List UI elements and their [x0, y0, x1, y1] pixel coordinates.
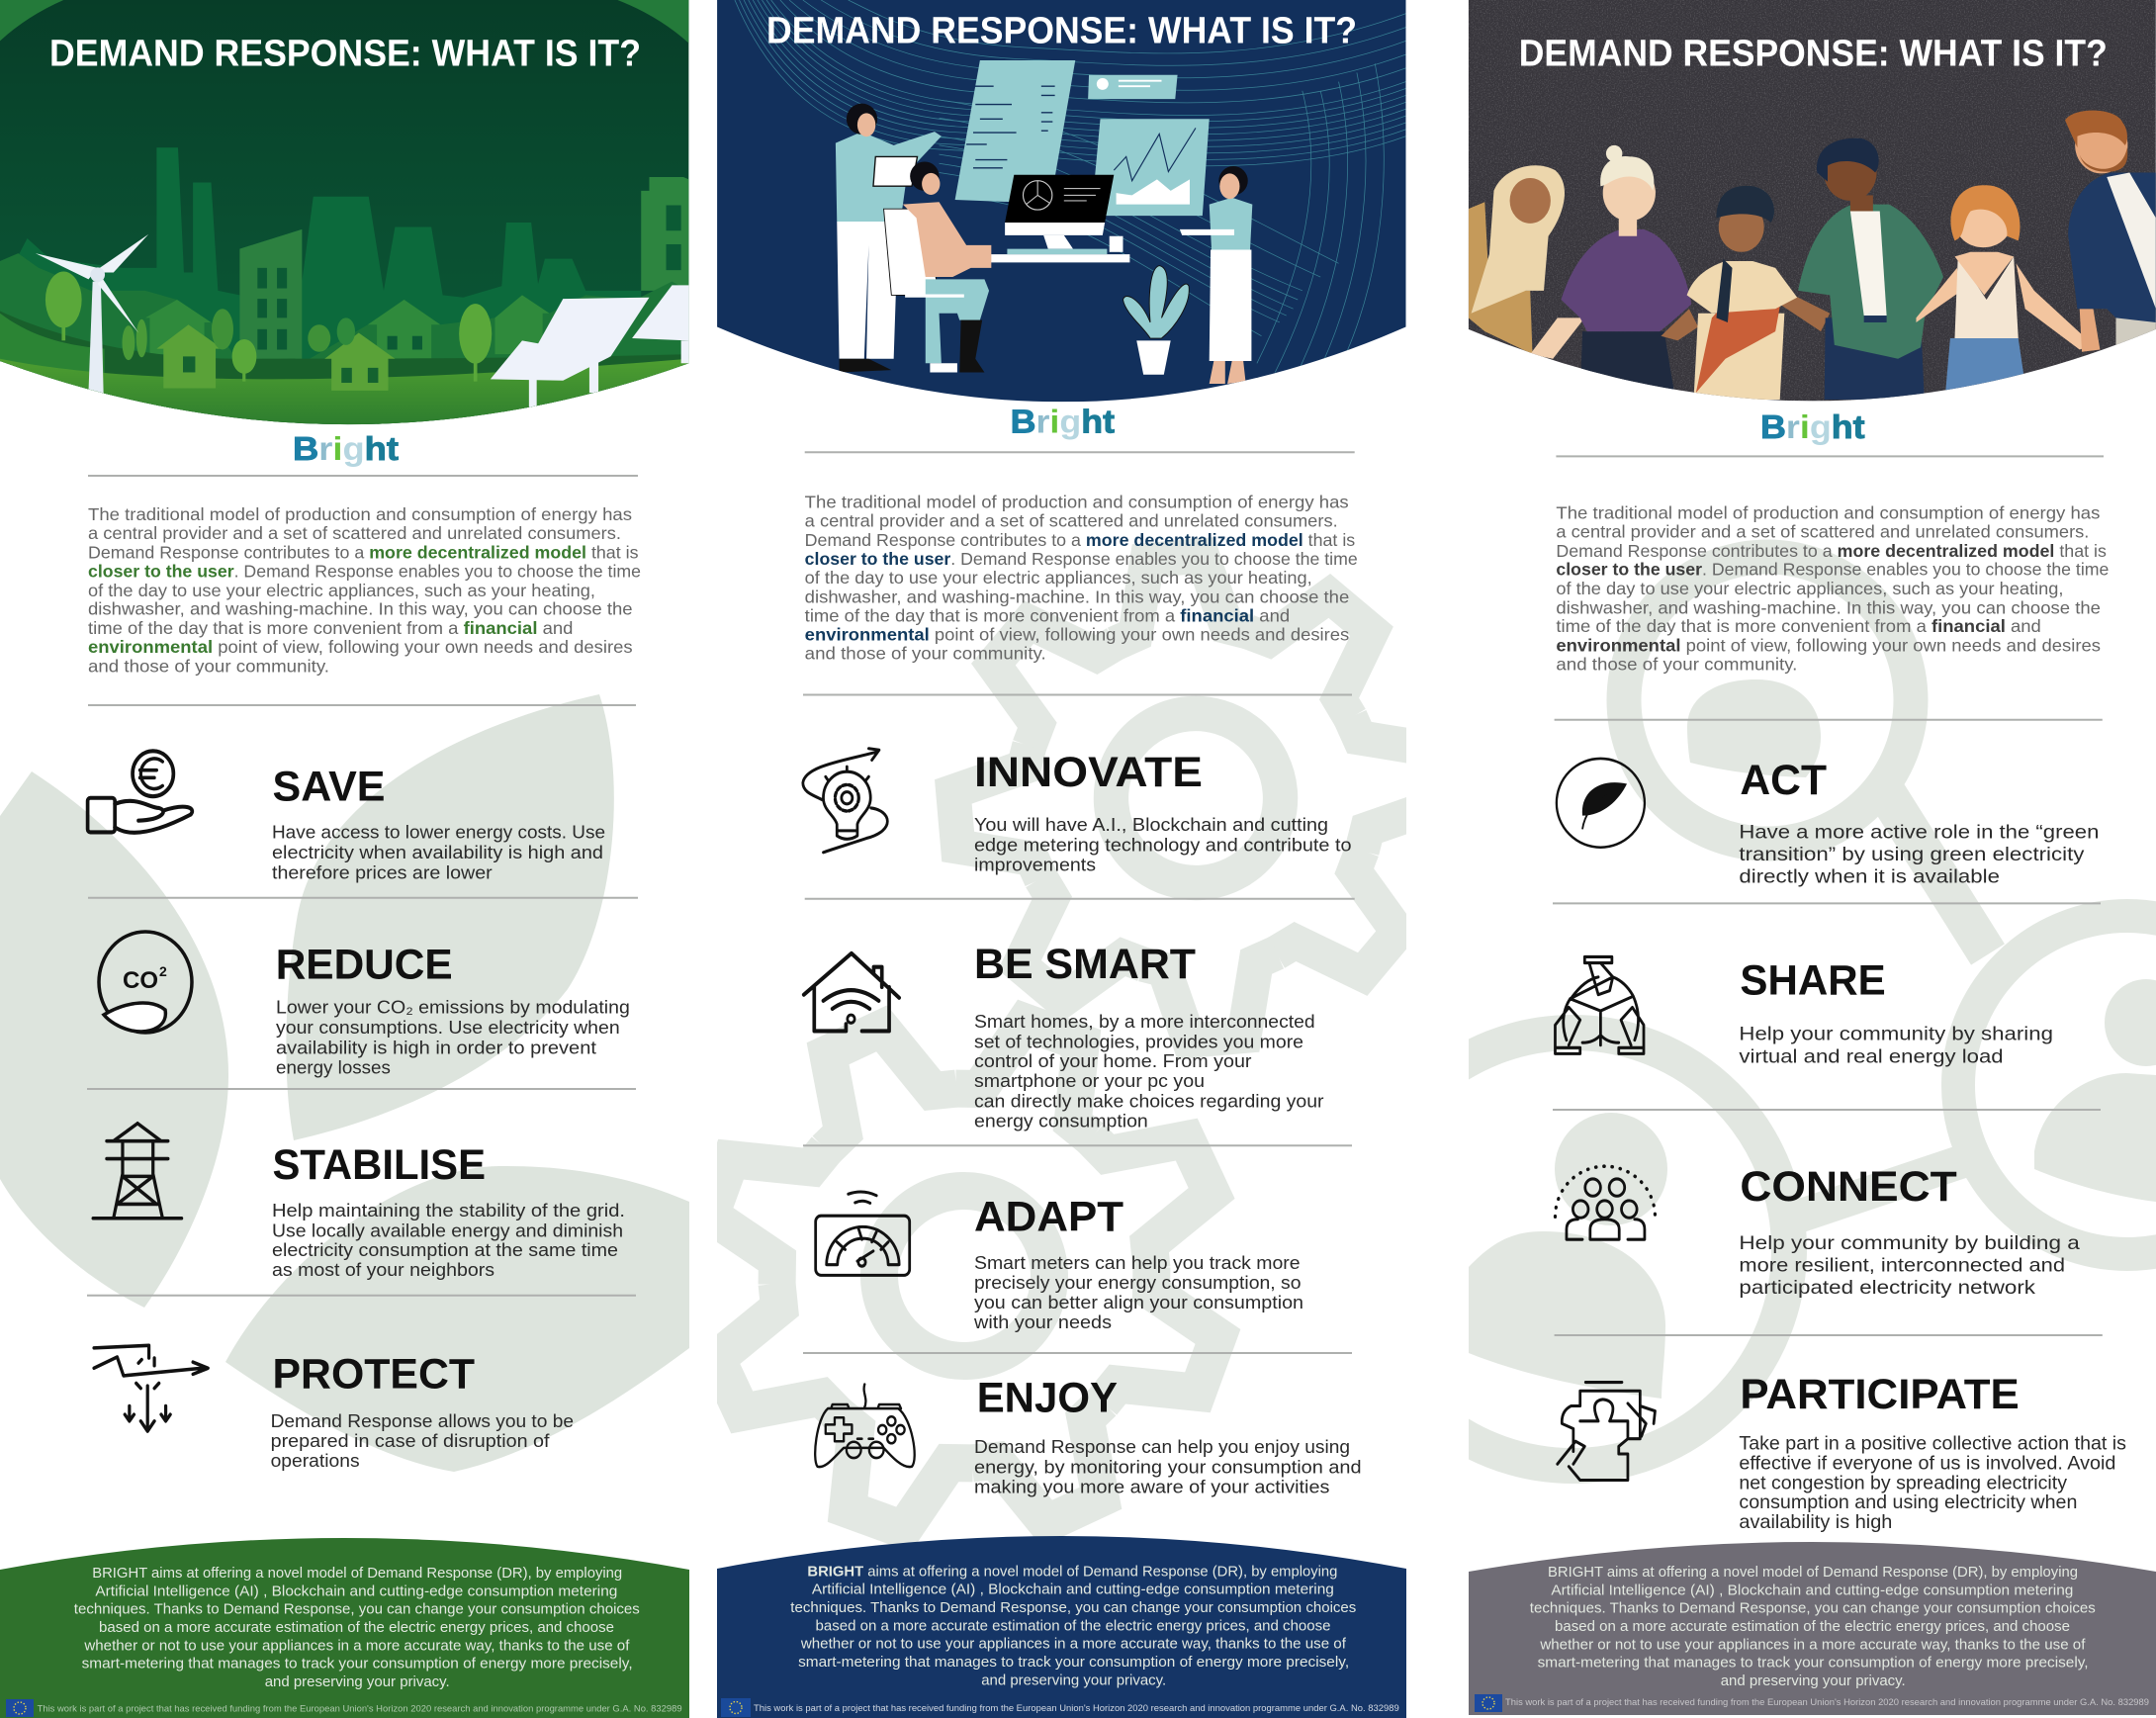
heading: ACT — [1740, 757, 1827, 804]
intro text — [88, 504, 641, 677]
body text — [272, 1200, 625, 1280]
footer text: BRIGHT aims at offering a novel model of Demand Response (DR), by employing — [92, 1565, 622, 1582]
intro text — [1556, 502, 2109, 675]
intro text: dishwasher, and washing-machine. In this way, you can choose the — [88, 599, 633, 619]
footer text: Artificial Intelligence (AI) , Blockchain and cutting-edge consumption metering — [812, 1582, 1334, 1598]
intro text: environmental point of view, following your own needs and desires — [1556, 635, 2101, 655]
heading: STABILISE — [273, 1141, 486, 1189]
body text: prepared in case of disruption of — [271, 1430, 550, 1451]
Bright logo: Bright — [1011, 404, 1115, 440]
body text: making you more aware of your activities — [974, 1476, 1329, 1496]
icon: CO2 bubble with leaf: 2 — [159, 963, 167, 979]
footer band — [717, 1536, 1406, 1718]
body text: smartphone or your pc you — [974, 1070, 1205, 1091]
footer text: and preserving your privacy. — [981, 1672, 1166, 1688]
intro text: and those of your community. — [1556, 655, 1797, 675]
item: Innovate — [803, 749, 1351, 875]
intro text: dishwasher, and washing-machine. In this way, you can choose the — [805, 587, 1349, 606]
heading: SHARE — [1740, 957, 1886, 1005]
intro text: environmental point of view, following your own needs and desires — [805, 624, 1350, 644]
divider — [88, 704, 636, 706]
panel: blue (Innovate, Be Smart, Adapt, Enjoy) — [717, 0, 1406, 1718]
Bright logo: Bright — [1760, 408, 1865, 445]
body text: Have a more active role in the “green — [1739, 822, 2099, 844]
intro text: time of the day that is more convenient from a financial and — [88, 618, 573, 638]
item: Adapt — [816, 1192, 1303, 1332]
heading: REDUCE — [276, 941, 453, 988]
intro text: a central provider and a set of scattered and unrelated consumers. — [88, 523, 621, 543]
icon: disruption arrows — [94, 1345, 208, 1431]
intro text: Demand Response contributes to a more decentralized model that is — [805, 530, 1355, 550]
funding statement: This work is part of a project that has received funding from the European Union's Horizon 2020 research and innovation programme under G.A. No. 832989 — [754, 1703, 1399, 1714]
footer text: techniques. Thanks to Demand Response, you can change your consumption choices — [1530, 1600, 2096, 1617]
icon: hand holding euro coin — [88, 751, 192, 833]
body text: with your needs — [973, 1311, 1112, 1332]
EU flag — [1475, 1694, 1502, 1712]
icon: smart home with wifi — [804, 953, 899, 1031]
footer band — [1469, 1542, 2156, 1715]
icon: smart meter gauge — [816, 1192, 910, 1275]
body text: You will have A.I., Blockchain and cutting — [974, 814, 1328, 835]
intro text: closer to the user. Demand Response enables you to choose the time — [1556, 560, 2109, 580]
intro text: time of the day that is more convenient from a financial and — [805, 606, 1290, 626]
footer text: BRIGHT aims at offering a novel model of Demand Response (DR), by employing — [807, 1563, 1337, 1580]
body text: availability is high in order to prevent — [276, 1037, 596, 1057]
body text — [276, 997, 630, 1077]
heading: ENJOY — [977, 1375, 1118, 1422]
body text: Lower your CO₂ emissions by modulating — [276, 997, 630, 1018]
divider — [1556, 455, 2104, 457]
body text: edge metering technology and contribute to — [974, 834, 1351, 855]
body text: availability is high — [1739, 1511, 1892, 1533]
icon: community group in dotted arc — [1555, 1166, 1655, 1239]
icon: hands holding shared pieces — [1555, 956, 1644, 1053]
heading: PARTICIPATE — [1740, 1371, 2020, 1418]
title: DEMAND RESPONSE: WHAT IS IT? — [49, 34, 641, 75]
item: Reduce — [99, 932, 630, 1077]
panel: green (Save, Reduce, Stabilise, Protect) — [0, 0, 689, 1718]
intro text: time of the day that is more convenient from a financial and — [1556, 616, 2041, 636]
item: Stabilise — [93, 1124, 625, 1280]
icon: electricity pylon — [93, 1124, 182, 1219]
intro text — [805, 492, 1358, 664]
body text: you can better align your consumption — [974, 1292, 1303, 1312]
body text — [1739, 822, 2099, 887]
body text: therefore prices are lower — [272, 861, 493, 882]
intro text: closer to the user. Demand Response enables you to choose the time — [805, 549, 1358, 569]
intro text: and those of your community. — [805, 644, 1046, 664]
body text: energy consumption — [974, 1110, 1148, 1130]
footer text: BRIGHT aims at offering a novel model of Demand Response (DR), by employing — [1548, 1564, 2078, 1581]
footer text: based on a more accurate estimation of the electric energy prices, and choose — [815, 1617, 1331, 1634]
footer text: and preserving your privacy. — [265, 1673, 450, 1690]
body text: transition” by using green electricity — [1739, 844, 2085, 865]
footer text: whether or not to use your appliances in a more accurate way, thanks to the use of — [800, 1636, 1347, 1653]
heading: SAVE — [273, 763, 386, 810]
footer text: whether or not to use your appliances in a more accurate way, thanks to the use of — [83, 1637, 630, 1654]
body text: participated electricity network — [1739, 1277, 2035, 1299]
item: Protect — [94, 1345, 574, 1471]
footer text: smart-metering that manages to track your consumption of energy more precisely, — [82, 1656, 633, 1673]
intro text: Demand Response contributes to a more decentralized model that is — [1556, 541, 2107, 561]
header illustration: team with screens and data — [712, 0, 1411, 408]
body text: Help maintaining the stability of the grid. — [272, 1200, 625, 1221]
body text: Have access to lower energy costs. Use — [272, 822, 605, 843]
footer band — [0, 1538, 689, 1718]
item: Participate — [1558, 1371, 2126, 1533]
body text: Help your community by building a — [1739, 1232, 2080, 1254]
footer text: techniques. Thanks to Demand Response, you can change your consumption choices — [74, 1601, 640, 1618]
intro text: The traditional model of production and consumption of energy has — [1556, 502, 2101, 522]
divider — [88, 475, 638, 477]
body text: net congestion by spreading electricity — [1739, 1473, 2067, 1494]
heading: CONNECT — [1740, 1163, 1957, 1211]
body text: virtual and real energy load — [1739, 1046, 2004, 1068]
intro text: environmental point of view, following your own needs and desires — [88, 637, 633, 657]
footer text: Artificial Intelligence (AI) , Blockchain and cutting-edge consumption metering — [1551, 1582, 2073, 1598]
body text: Demand Response allows you to be — [271, 1410, 574, 1431]
body text: more resilient, interconnected and — [1739, 1254, 2065, 1276]
title: DEMAND RESPONSE: WHAT IS IT? — [1519, 34, 2108, 75]
body text: set of technologies, provides you more — [974, 1031, 1303, 1051]
icon: CO2 bubble with leaf: CO — [123, 967, 158, 994]
body text — [974, 1436, 1362, 1496]
panel: grey (Act, Share, Connect, Participate) — [1468, 0, 2156, 1715]
footer text: smart-metering that manages to track your consumption of energy more precisely, — [798, 1654, 1349, 1671]
body text — [271, 1410, 574, 1471]
body text — [1739, 1432, 2126, 1533]
body text — [973, 1252, 1303, 1332]
intro text: The traditional model of production and consumption of energy has — [88, 504, 632, 524]
body text: Use locally available energy and diminish — [272, 1221, 623, 1241]
intro text: The traditional model of production and consumption of energy has — [805, 492, 1349, 511]
funding statement: This work is part of a project that has received funding from the European Union's Horizon 2020 research and innovation programme under G.A. No. 832989 — [1505, 1697, 2149, 1708]
item: Save — [88, 751, 605, 882]
Bright logo: Bright — [293, 430, 399, 467]
intro text: and those of your community. — [88, 657, 329, 677]
item: Enjoy — [815, 1375, 1362, 1496]
background community network — [1469, 540, 2156, 1484]
icon: game controller — [815, 1385, 915, 1467]
intro text: of the day to use your electric appliances, such as your heating, — [1556, 579, 2063, 598]
footer text: techniques. Thanks to Demand Response, you can change your consumption choices — [790, 1599, 1356, 1616]
icon: CO2 bubble with leaf — [99, 932, 192, 1033]
footer text — [1530, 1564, 2096, 1689]
footer text: and preserving your privacy. — [1721, 1673, 1906, 1689]
intro text: Demand Response contributes to a more decentralized model that is — [88, 542, 639, 562]
body text: can directly make choices regarding your — [974, 1090, 1323, 1112]
body text: your consumptions. Use electricity when — [276, 1017, 620, 1038]
footer text: Artificial Intelligence (AI) , Blockchain and cutting-edge consumption metering — [95, 1582, 617, 1599]
header illustration: group of people holding hands — [1444, 0, 2156, 408]
body text — [974, 814, 1351, 875]
body text: Smart meters can help you track more — [974, 1252, 1301, 1273]
background leaves — [0, 694, 689, 1472]
title: DEMAND RESPONSE: WHAT IS IT? — [766, 11, 1357, 52]
heading: ADAPT — [974, 1193, 1123, 1240]
footer text: based on a more accurate estimation of the electric energy prices, and choose — [99, 1619, 614, 1636]
body text: consumption and using electricity when — [1739, 1492, 2077, 1513]
funding statement: This work is part of a project that has received funding from the European Union's Horizon 2020 research and innovation programme under G.A. No. 832989 — [38, 1704, 682, 1715]
body text: precisely your energy consumption, so — [974, 1272, 1302, 1293]
intro text: of the day to use your electric appliances, such as your heating, — [805, 568, 1312, 588]
intro text: dishwasher, and washing-machine. In this way, you can choose the — [1556, 597, 2101, 617]
item: Connect — [1555, 1163, 2080, 1299]
item: Be Smart — [804, 941, 1323, 1130]
intro text: closer to the user. Demand Response enables you to choose the time — [88, 562, 641, 582]
divider — [805, 451, 1355, 453]
body text — [1739, 1024, 2053, 1068]
body text: effective if everyone of us is involved. Avoid — [1739, 1452, 2115, 1474]
icon: leaf in circle — [1557, 759, 1645, 848]
body text: electricity when availability is high and — [272, 842, 603, 862]
body text: improvements — [974, 855, 1096, 875]
footer text — [790, 1563, 1356, 1688]
footer text: based on a more accurate estimation of the electric energy prices, and choose — [1555, 1618, 2070, 1635]
body text: energy losses — [276, 1056, 391, 1077]
body text: Help your community by sharing — [1739, 1024, 2053, 1045]
header illustration: green city with wind turbine and solar panels — [0, 0, 688, 454]
EU flag — [721, 1698, 751, 1717]
body text: Demand Response can help you enjoy using — [974, 1436, 1350, 1457]
body text: electricity consumption at the same time — [272, 1239, 618, 1260]
background gears — [717, 537, 1406, 1545]
body text: energy, by monitoring your consumption and — [974, 1456, 1362, 1477]
body text: as most of your neighbors — [272, 1259, 494, 1280]
body text — [1739, 1232, 2080, 1299]
footer text: smart-metering that manages to track your consumption of energy more precisely, — [1538, 1655, 2089, 1672]
EU flag — [6, 1699, 34, 1717]
body text: Smart homes, by a more interconnected — [974, 1011, 1315, 1032]
heading: PROTECT — [273, 1351, 475, 1399]
heading: INNOVATE — [974, 749, 1203, 796]
item: Share — [1555, 956, 2053, 1068]
body text: Take part in a positive collective action that is — [1739, 1432, 2126, 1454]
body text: control of your home. From your — [974, 1050, 1252, 1071]
footer text: whether or not to use your appliances in a more accurate way, thanks to the use of — [1539, 1636, 2086, 1653]
heading: BE SMART — [974, 941, 1196, 988]
item: Act — [1557, 757, 2099, 887]
body text: operations — [271, 1450, 360, 1471]
body text — [272, 822, 605, 882]
body text: directly when it is available — [1739, 865, 2000, 887]
icon: light bulb with gear and arrow — [803, 749, 887, 853]
intro text: of the day to use your electric appliances, such as your heating, — [88, 581, 595, 600]
icon: hands joining puzzle piece — [1558, 1383, 1655, 1481]
divider — [803, 694, 1352, 696]
footer text — [74, 1565, 640, 1690]
body text — [974, 1011, 1323, 1130]
intro text: a central provider and a set of scattered and unrelated consumers. — [1556, 522, 2089, 542]
divider — [1555, 719, 2103, 721]
intro text: a central provider and a set of scattered and unrelated consumers. — [805, 511, 1338, 531]
